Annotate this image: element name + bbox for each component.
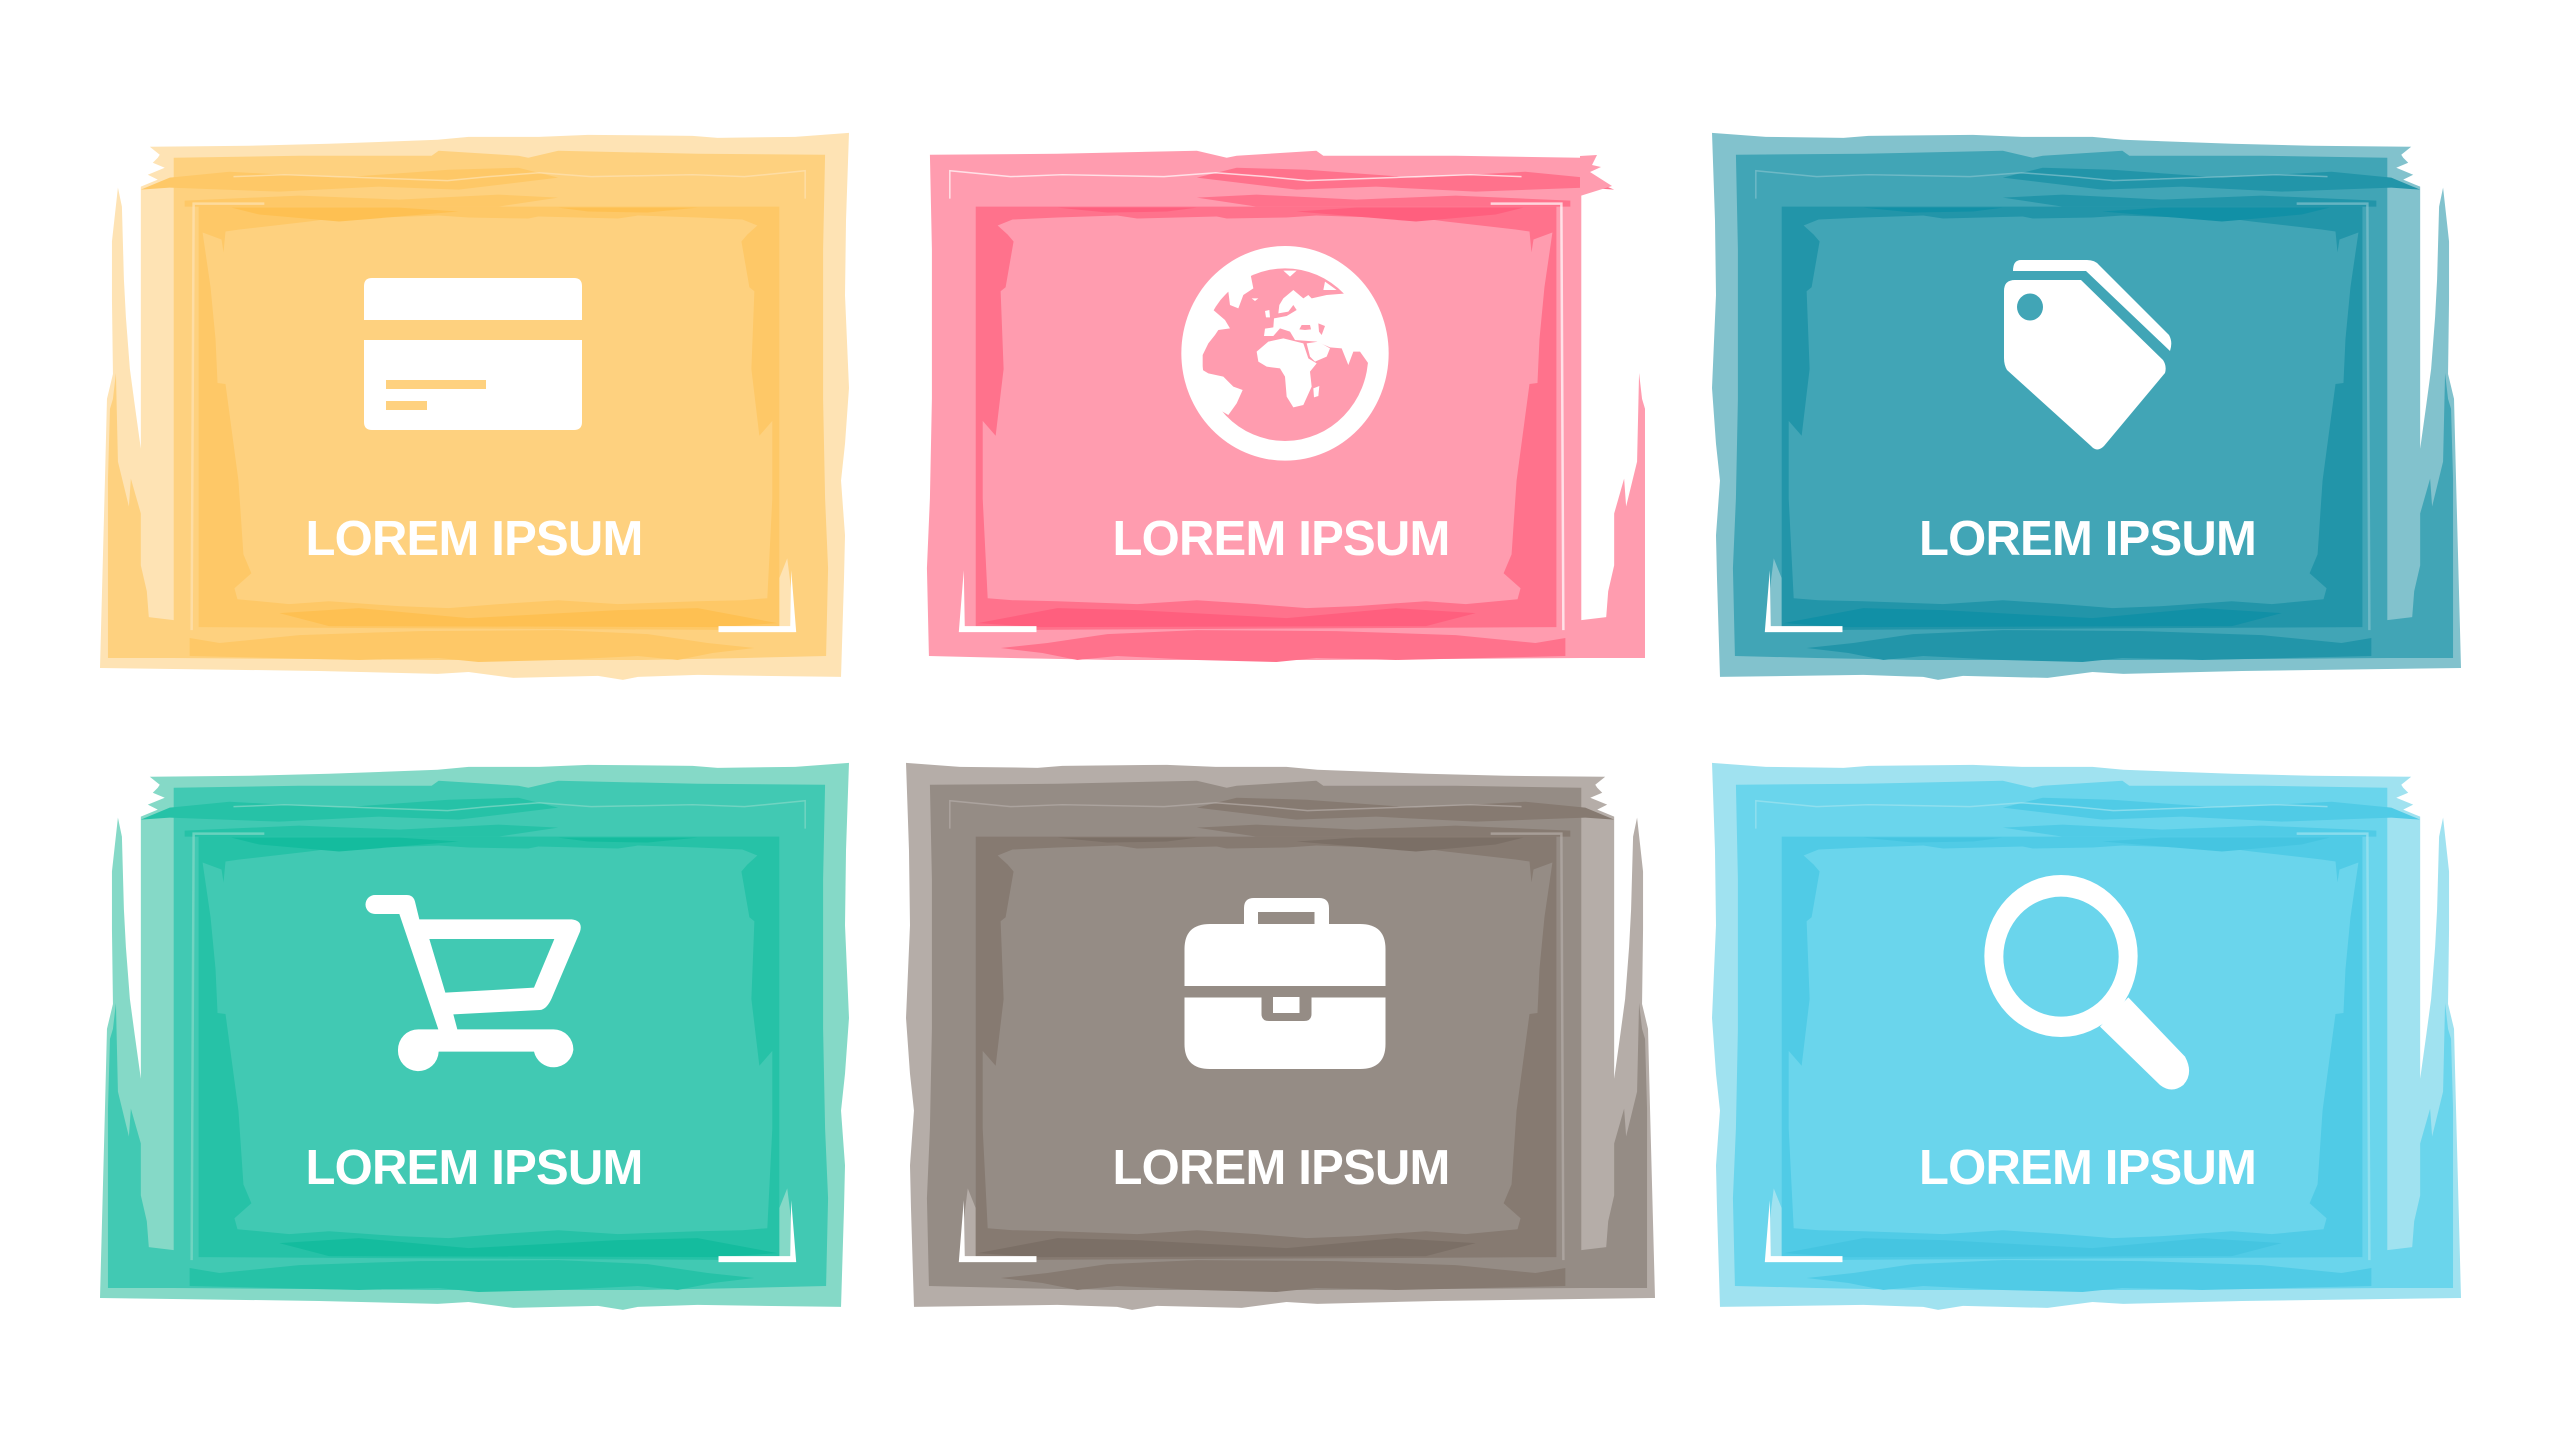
brush frame: yellow <box>100 133 849 680</box>
icon: shopping cart <box>366 895 581 1071</box>
label: lorem ipsum: LOREM IPSUM <box>306 1141 642 1195</box>
icon: briefcase <box>1184 898 1386 1069</box>
label: lorem ipsum: LOREM IPSUM <box>1919 1141 2256 1195</box>
brush frame: teal <box>1712 133 2461 680</box>
brush frame: cyan <box>1712 763 2461 1310</box>
brush frame: pink <box>906 133 1669 680</box>
icon: globe <box>1181 246 1389 461</box>
label: lorem ipsum: LOREM IPSUM <box>1113 512 1449 566</box>
panel: magnifier (cyan) <box>1712 763 2461 1310</box>
label: lorem ipsum: LOREM IPSUM <box>1919 512 2256 566</box>
label: lorem ipsum: LOREM IPSUM <box>1113 1141 1449 1195</box>
icon: price tag <box>2004 260 2171 450</box>
panel: shopping cart (green) <box>100 763 849 1310</box>
brush frame: green <box>100 763 849 1310</box>
label: lorem ipsum: LOREM IPSUM <box>306 512 642 566</box>
panel: briefcase (brown) <box>906 763 1655 1310</box>
panel: price tag (teal) <box>1712 133 2461 680</box>
brush frame: brown <box>906 763 1655 1310</box>
icon: magnifying glass <box>1984 875 2189 1089</box>
panel: credit card (yellow) <box>100 133 849 680</box>
panel: globe (pink) <box>906 133 1669 680</box>
icon: credit card <box>364 278 582 430</box>
